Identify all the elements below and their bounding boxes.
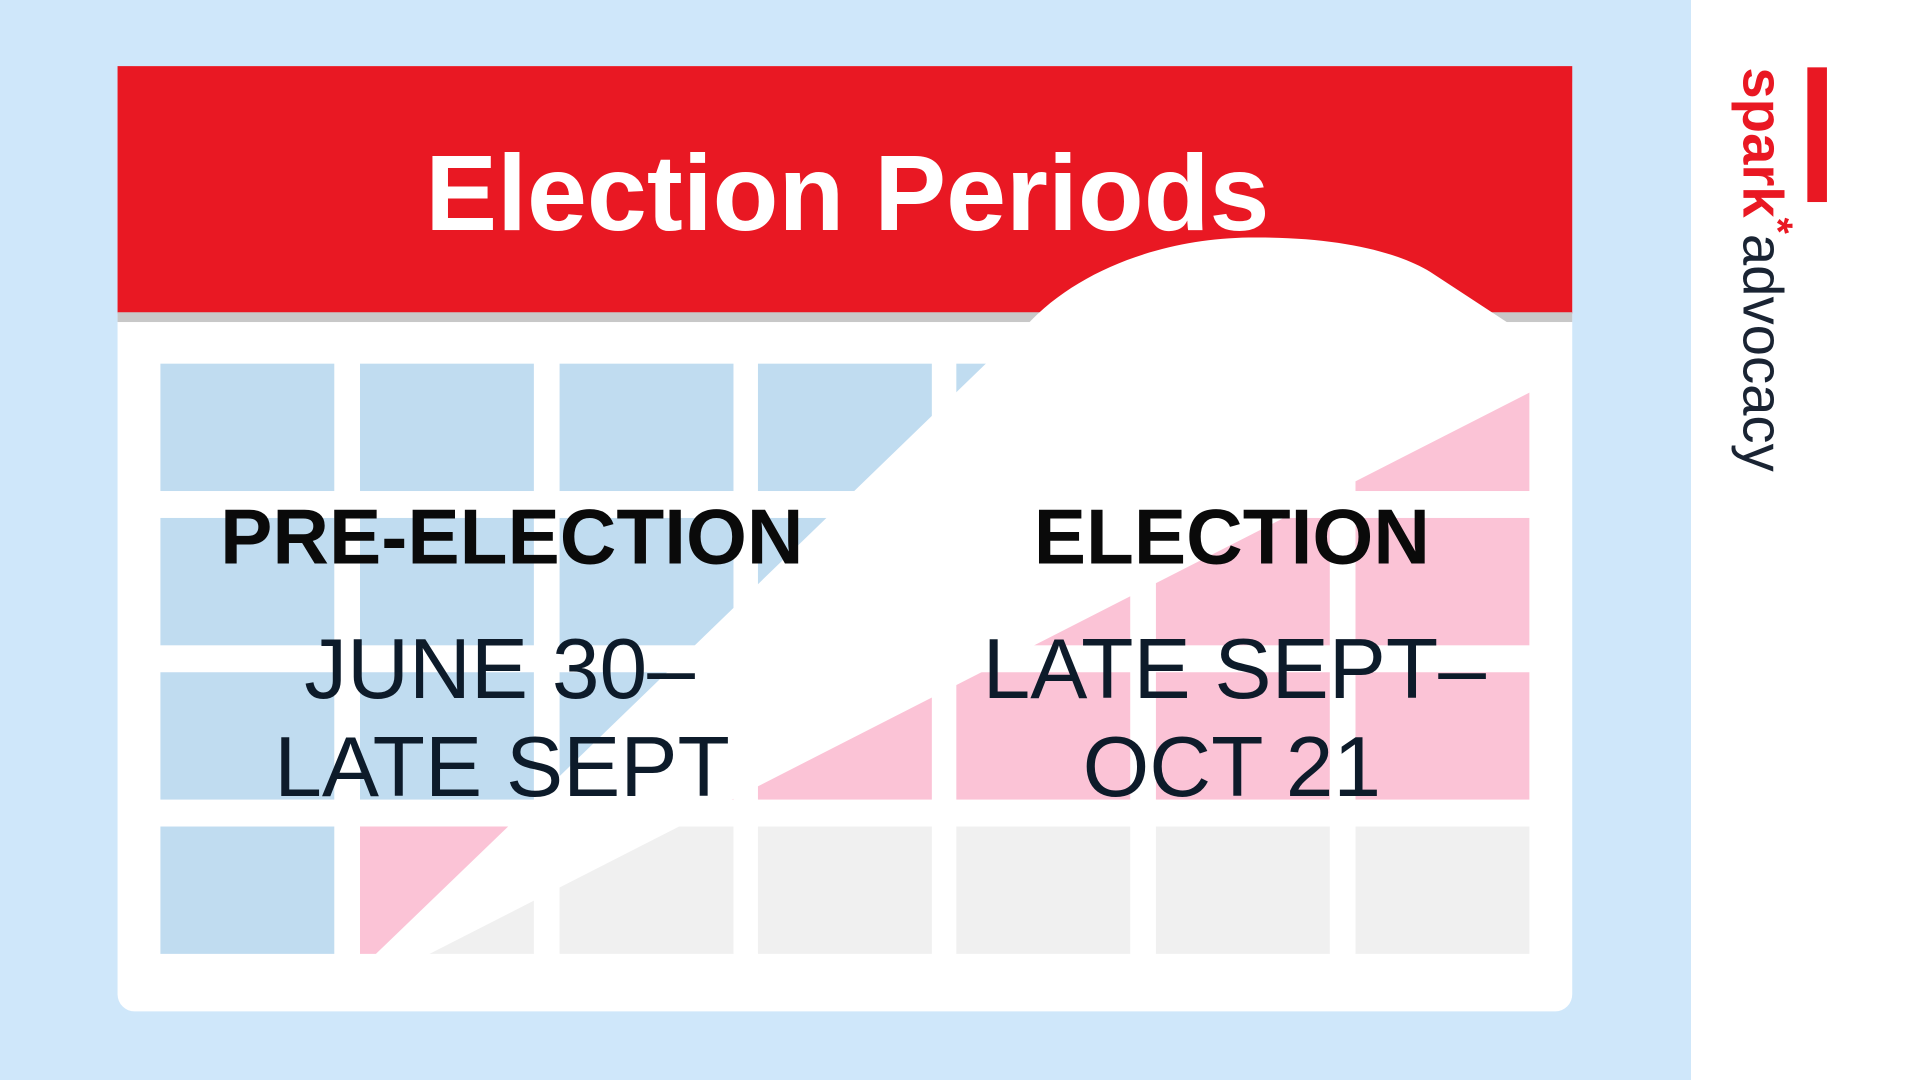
text block: election: LATE SEPT–: [983, 621, 1486, 717]
logo: *: [1754, 218, 1801, 235]
calendar grid: pink under page: [732, 392, 1530, 800]
page curl top: [1026, 237, 1509, 326]
text block: pre-election: [220, 492, 804, 815]
text block: election: [983, 492, 1486, 815]
panel: calendar: [118, 66, 1572, 1011]
text block: pre-election: JUNE 30–: [304, 621, 695, 717]
calendar grid: blue top page: [160, 364, 986, 954]
title: Election Periods: [425, 132, 1269, 253]
logo: advocacy: [1732, 234, 1795, 473]
text block: election: OCT 21: [1083, 719, 1381, 815]
text block: election: ELECTION: [1034, 492, 1430, 580]
logo: [1732, 67, 1827, 473]
text block: pre-election: LATE SEPT: [274, 719, 730, 815]
logo: spark: [1732, 67, 1795, 218]
text block: pre-election: PRE-ELECTION: [220, 492, 804, 580]
page curl underside: [360, 827, 508, 954]
calendar grid: grey bottom row: [360, 827, 1529, 954]
